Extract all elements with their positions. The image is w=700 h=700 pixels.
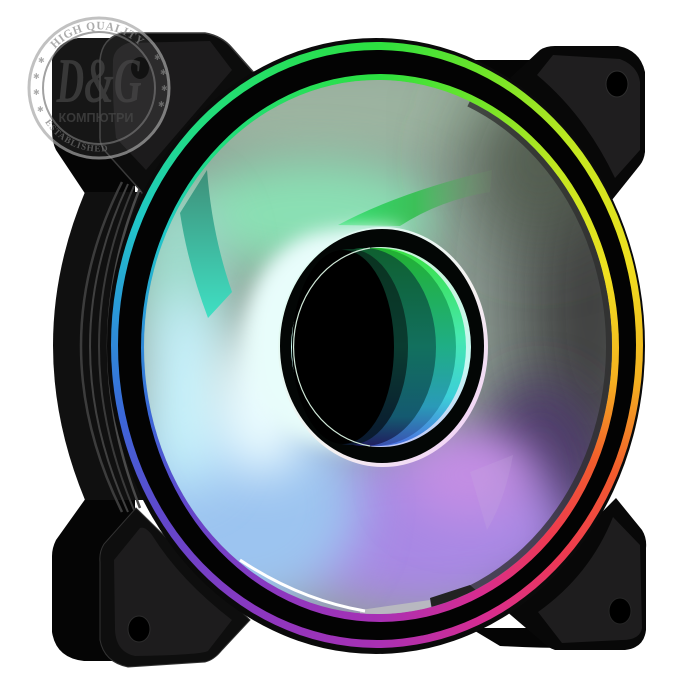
watermark stars: ✱ bbox=[160, 68, 167, 77]
black band between rings bbox=[118, 50, 636, 640]
back frame ears bbox=[52, 38, 570, 661]
lens and blades bbox=[144, 80, 612, 614]
blade: right edge bbox=[498, 455, 513, 473]
hub mirror tunnel bbox=[291, 247, 471, 447]
watermark seal rings bbox=[29, 18, 169, 158]
front corner: bottom left bbox=[100, 508, 250, 667]
watermark stars: ✱ bbox=[37, 105, 44, 114]
watermark stars: ✱ bbox=[161, 84, 168, 93]
lens highlight bbox=[240, 560, 365, 611]
watermark stars: ✱ bbox=[33, 72, 40, 81]
lens glow bbox=[144, 80, 612, 614]
white hub glow bbox=[244, 227, 400, 451]
blade: teal edge bbox=[180, 170, 232, 318]
watermark arc text bottom: ESTABLISHED bbox=[45, 118, 108, 152]
front corner: bottom right bbox=[505, 498, 646, 650]
hub black ring bbox=[280, 229, 484, 463]
lower dark reflection bbox=[430, 585, 476, 607]
frame circle bbox=[107, 38, 645, 654]
watermark stars: ✱ bbox=[38, 56, 45, 65]
watermark logo subtitle: КОМПЮТРИ bbox=[58, 110, 134, 125]
blade: green edge bbox=[338, 170, 492, 226]
hub halo bbox=[278, 227, 488, 467]
watermark stars: ✱ bbox=[158, 100, 165, 109]
watermark stars: ✱ bbox=[33, 88, 40, 97]
watermark arc text top: HIGH QUALITY bbox=[50, 22, 144, 49]
outer RGB ring bbox=[111, 42, 643, 648]
watermark logo D&G: D&G bbox=[56, 45, 142, 116]
inner RGB ring bbox=[141, 74, 619, 622]
front corner: top left bbox=[100, 33, 262, 205]
lower gray reflection bbox=[360, 600, 431, 614]
watermark stars: ✱ bbox=[154, 53, 161, 62]
fan body side ridges bbox=[53, 182, 230, 512]
front corner: top right bbox=[510, 46, 645, 200]
dark lens rim right bbox=[470, 101, 612, 592]
